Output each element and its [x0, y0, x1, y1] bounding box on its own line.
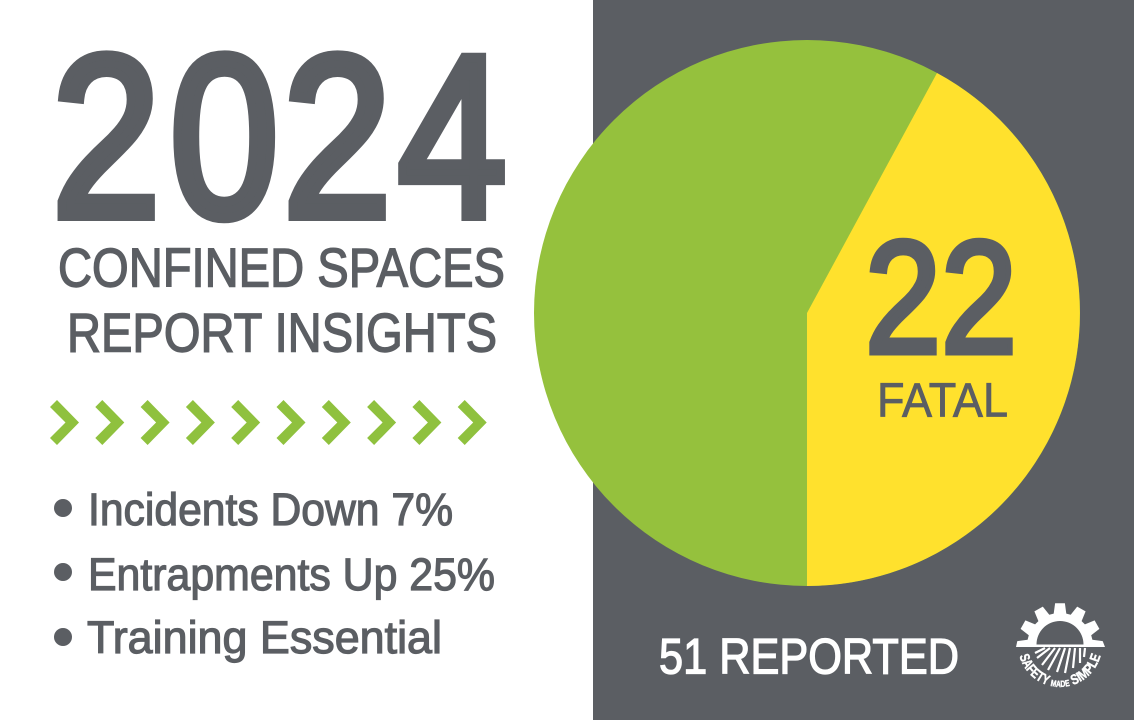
stat: fatal count: 22 [865, 208, 1017, 386]
logo field stripes [1035, 648, 1085, 673]
panel: dark right background [593, 0, 1134, 720]
icon: Safety Made Simple logo: SAFETY [1020, 654, 1052, 684]
bullet item: incidents: Incidents Down 7% [88, 484, 453, 535]
pie chart [534, 40, 1080, 586]
heading: line one: CONFINED SPACES [58, 236, 505, 298]
pie slice: non-fatal [534, 40, 1080, 586]
icon: row of chevrons [50, 400, 487, 445]
icon: Safety Made Simple logo: MADE [1050, 680, 1070, 688]
title: year: 2024 [52, 9, 506, 266]
icon: Safety Made Simple logo: SIMPLE [1070, 652, 1101, 684]
heading: line two: REPORT INSIGHTS [67, 302, 497, 364]
bullet list [54, 484, 495, 663]
bullet item: training: Training Essential [87, 612, 442, 663]
bullet item: entrapments: Entrapments Up 25% [88, 549, 495, 600]
logo arc text [1018, 645, 1102, 687]
logo gear [1016, 603, 1105, 647]
pie slice: fatal [807, 73, 1080, 586]
icon: Safety Made Simple logo [1016, 603, 1105, 688]
stat label: fatal: FATAL [877, 374, 1008, 428]
stat: total reported: 51 REPORTED [659, 628, 959, 684]
